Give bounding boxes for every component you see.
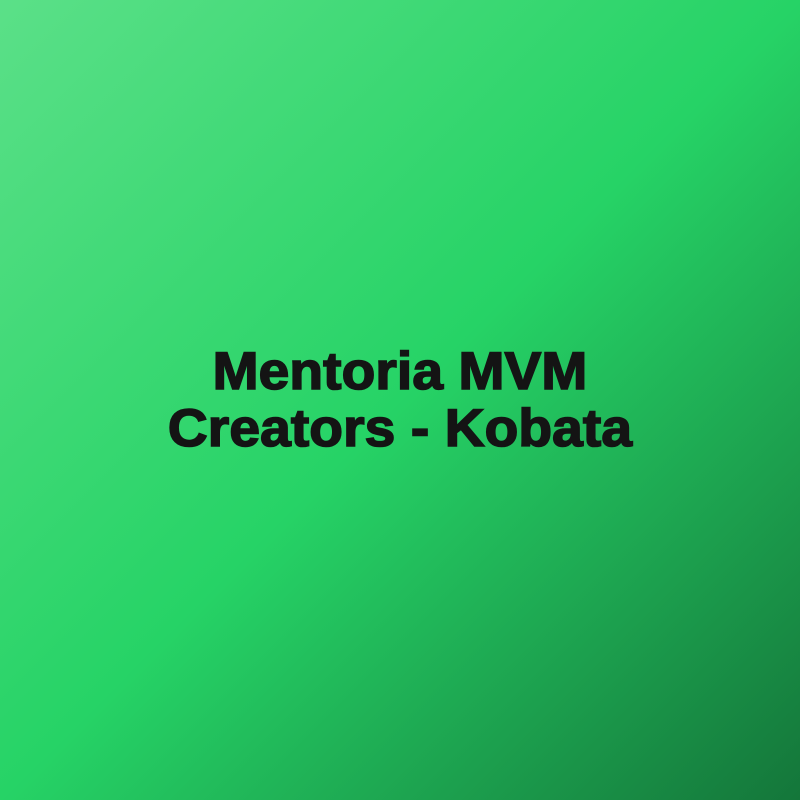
title: Creators - Kobata [168, 399, 632, 458]
title: Mentoria MVM [213, 342, 587, 401]
title [168, 342, 634, 458]
